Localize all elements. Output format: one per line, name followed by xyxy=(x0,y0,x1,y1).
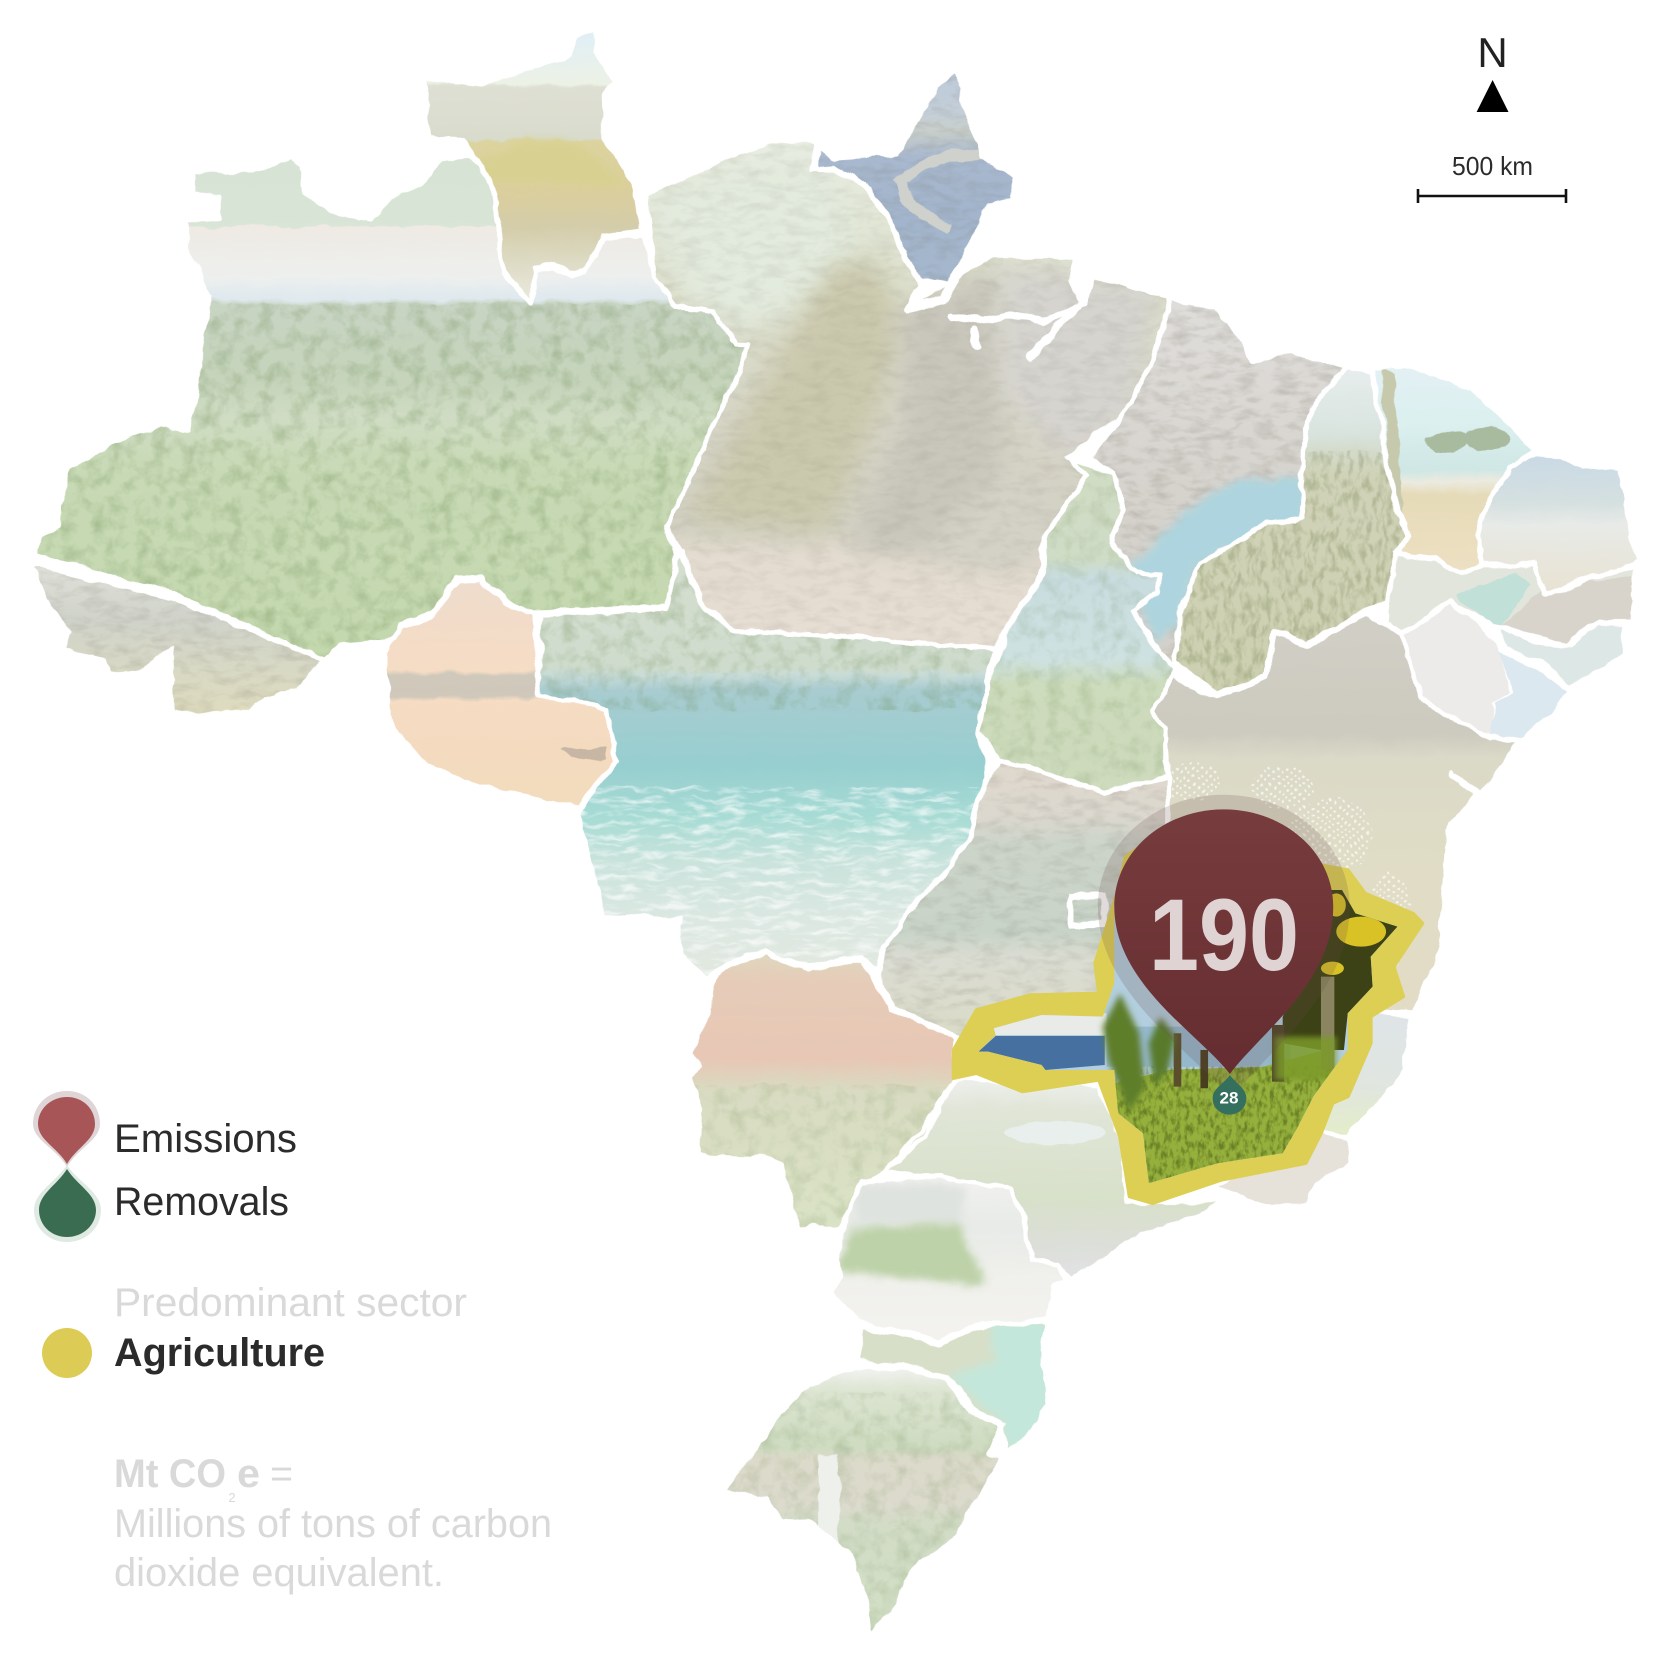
state: Santa Catarina xyxy=(856,1319,1051,1455)
legend: emissions pin xyxy=(33,1091,100,1167)
state photo xyxy=(977,847,1401,1183)
state: Rio de Janeiro xyxy=(1218,1133,1348,1203)
sector outline: agriculture xyxy=(954,843,1422,1203)
removals drop: 28: 28 xyxy=(1220,1088,1238,1108)
state: Sao Paulo xyxy=(883,1079,1223,1278)
state: Piaui xyxy=(1176,367,1407,694)
state: Parana xyxy=(832,1174,1066,1342)
state: Mato Grosso do Sul xyxy=(689,952,957,1230)
legend: removals label: Removals xyxy=(114,1180,289,1224)
pin halo xyxy=(1098,795,1350,1099)
state: Rondonia xyxy=(386,582,613,806)
note: unit definition xyxy=(114,1452,552,1595)
state: Pernambuco xyxy=(1500,625,1622,686)
state: Rio Grande do Norte xyxy=(1477,452,1639,596)
state: Amazonas xyxy=(35,155,750,660)
north arrow xyxy=(1477,29,1508,112)
state: Alagoas xyxy=(1493,652,1566,737)
state: Minas Gerais highlighted xyxy=(954,843,1422,1203)
state: Mato Grosso xyxy=(540,553,995,980)
note: unit definition: = xyxy=(270,1452,293,1496)
note: unit definition: Millions of tons of carbon xyxy=(114,1502,552,1546)
removals drop: 28 xyxy=(1213,1075,1246,1115)
Marajo coast xyxy=(907,239,1082,356)
legend: agriculture label: Agriculture xyxy=(114,1331,325,1375)
state: Para xyxy=(646,141,1171,649)
emissions pin body xyxy=(1114,809,1333,1074)
legend: emissions label: Emissions xyxy=(114,1117,297,1161)
legend: removals drop xyxy=(34,1165,101,1242)
state: Tocantins xyxy=(979,457,1176,793)
state: Amapa xyxy=(817,70,1016,286)
state: Espirito Santo xyxy=(1325,1010,1409,1133)
note: unit definition: dioxide equivalent. xyxy=(114,1551,444,1595)
legend: agriculture swatch xyxy=(42,1328,92,1378)
north arrow: N xyxy=(1477,29,1508,76)
note: unit definition: 2 xyxy=(228,1490,236,1505)
state: Bahia xyxy=(1152,614,1519,1013)
state: Sergipe xyxy=(1404,604,1511,737)
note: unit definition: Mt CO xyxy=(114,1452,226,1496)
scale bar: 500 km xyxy=(1452,151,1533,181)
emissions value: 190 xyxy=(1149,878,1299,992)
state: Rio Grande do Sul xyxy=(723,1365,1003,1636)
emissions pin with value xyxy=(1098,795,1350,1115)
state: Acre xyxy=(29,556,324,715)
state: Maranhao xyxy=(1093,300,1342,662)
state: Goias xyxy=(880,764,1168,1036)
state: Ceara xyxy=(1373,364,1535,574)
legend: predominant sector heading: Predominant sector xyxy=(114,1281,467,1325)
state: Paraiba xyxy=(1386,553,1636,644)
state: Roraima xyxy=(424,29,641,303)
scale bar xyxy=(1418,151,1566,203)
note: unit definition: e xyxy=(237,1452,260,1496)
legend xyxy=(33,1091,552,1595)
